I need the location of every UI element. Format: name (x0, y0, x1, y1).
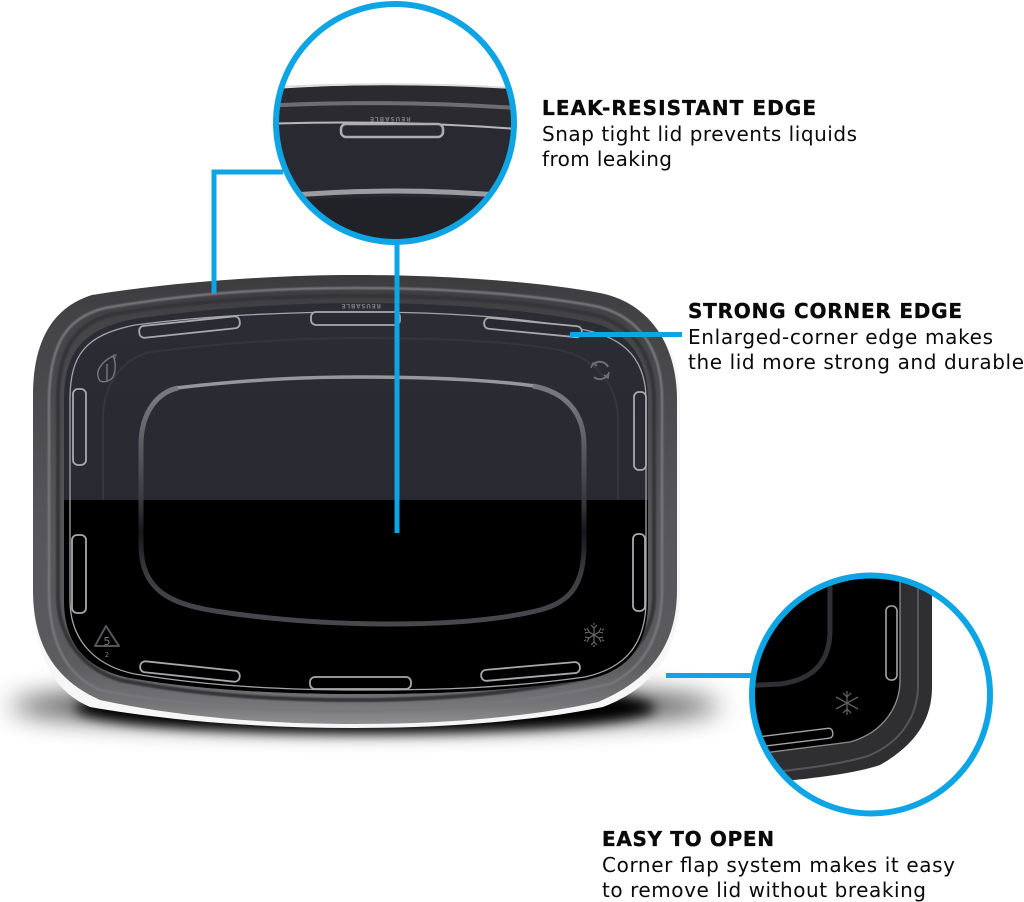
icon: leaf logo (98, 355, 117, 382)
lid slots (72, 312, 646, 689)
white lid fringe (33, 275, 680, 728)
text block: leak-resistant edge: Snap tight lid prevents liquids (542, 122, 857, 146)
text block: leak-resistant edge: from leaking (542, 147, 672, 171)
callout connector: strong corner edge (570, 332, 682, 337)
inner tray outline (141, 377, 584, 624)
inner plate, upper translucent half (64, 303, 648, 694)
callout connector: easy to open (666, 673, 754, 678)
magnified lid detail (279, 83, 511, 239)
zoom circle: leak-resistant edge (273, 1, 517, 245)
text block: strong corner edge: Enlarged-corner edge makes (688, 325, 993, 349)
text block: easy to open: Corner flap system makes it easy (602, 853, 955, 877)
icon: snowflake (584, 623, 604, 647)
circle outline (752, 576, 990, 814)
outer rim of the lid (33, 275, 677, 724)
icon: recycle arrows (591, 362, 609, 379)
icon: recycling code 5: 2 (105, 651, 109, 659)
text block: strong corner edge (688, 299, 1024, 374)
text block: strong corner edge: STRONG CORNER EDGE (688, 299, 962, 323)
rim highlight strokes (49, 288, 662, 711)
text block: leak-resistant edge: LEAK-RESISTANT EDGE (542, 96, 816, 120)
icon: recycling code 5 (95, 626, 119, 659)
inner plate, lower black half (60, 500, 652, 700)
magnified corner detail (755, 578, 932, 780)
container illustration (10, 275, 720, 733)
text block: easy to open: EASY TO OPEN (602, 827, 774, 851)
faint inner contour (103, 338, 618, 500)
drop shadow under container (10, 683, 720, 733)
callout connector: leak-resistant edge (214, 172, 397, 533)
text block: easy to open (602, 827, 955, 902)
embossed rim lettering: REUSABLE (341, 302, 381, 309)
text block: strong corner edge: the lid more strong and durable (688, 350, 1024, 374)
circle outline (276, 4, 514, 242)
icon: recycling code 5: 5 (104, 635, 110, 648)
zoom circle: easy to open (740, 560, 990, 814)
text block: leak-resistant edge (542, 96, 857, 171)
text block: easy to open: to remove lid without breaking (602, 878, 926, 902)
magnified lid detail: REUSABLE (369, 115, 411, 122)
inner rim line (70, 312, 646, 690)
